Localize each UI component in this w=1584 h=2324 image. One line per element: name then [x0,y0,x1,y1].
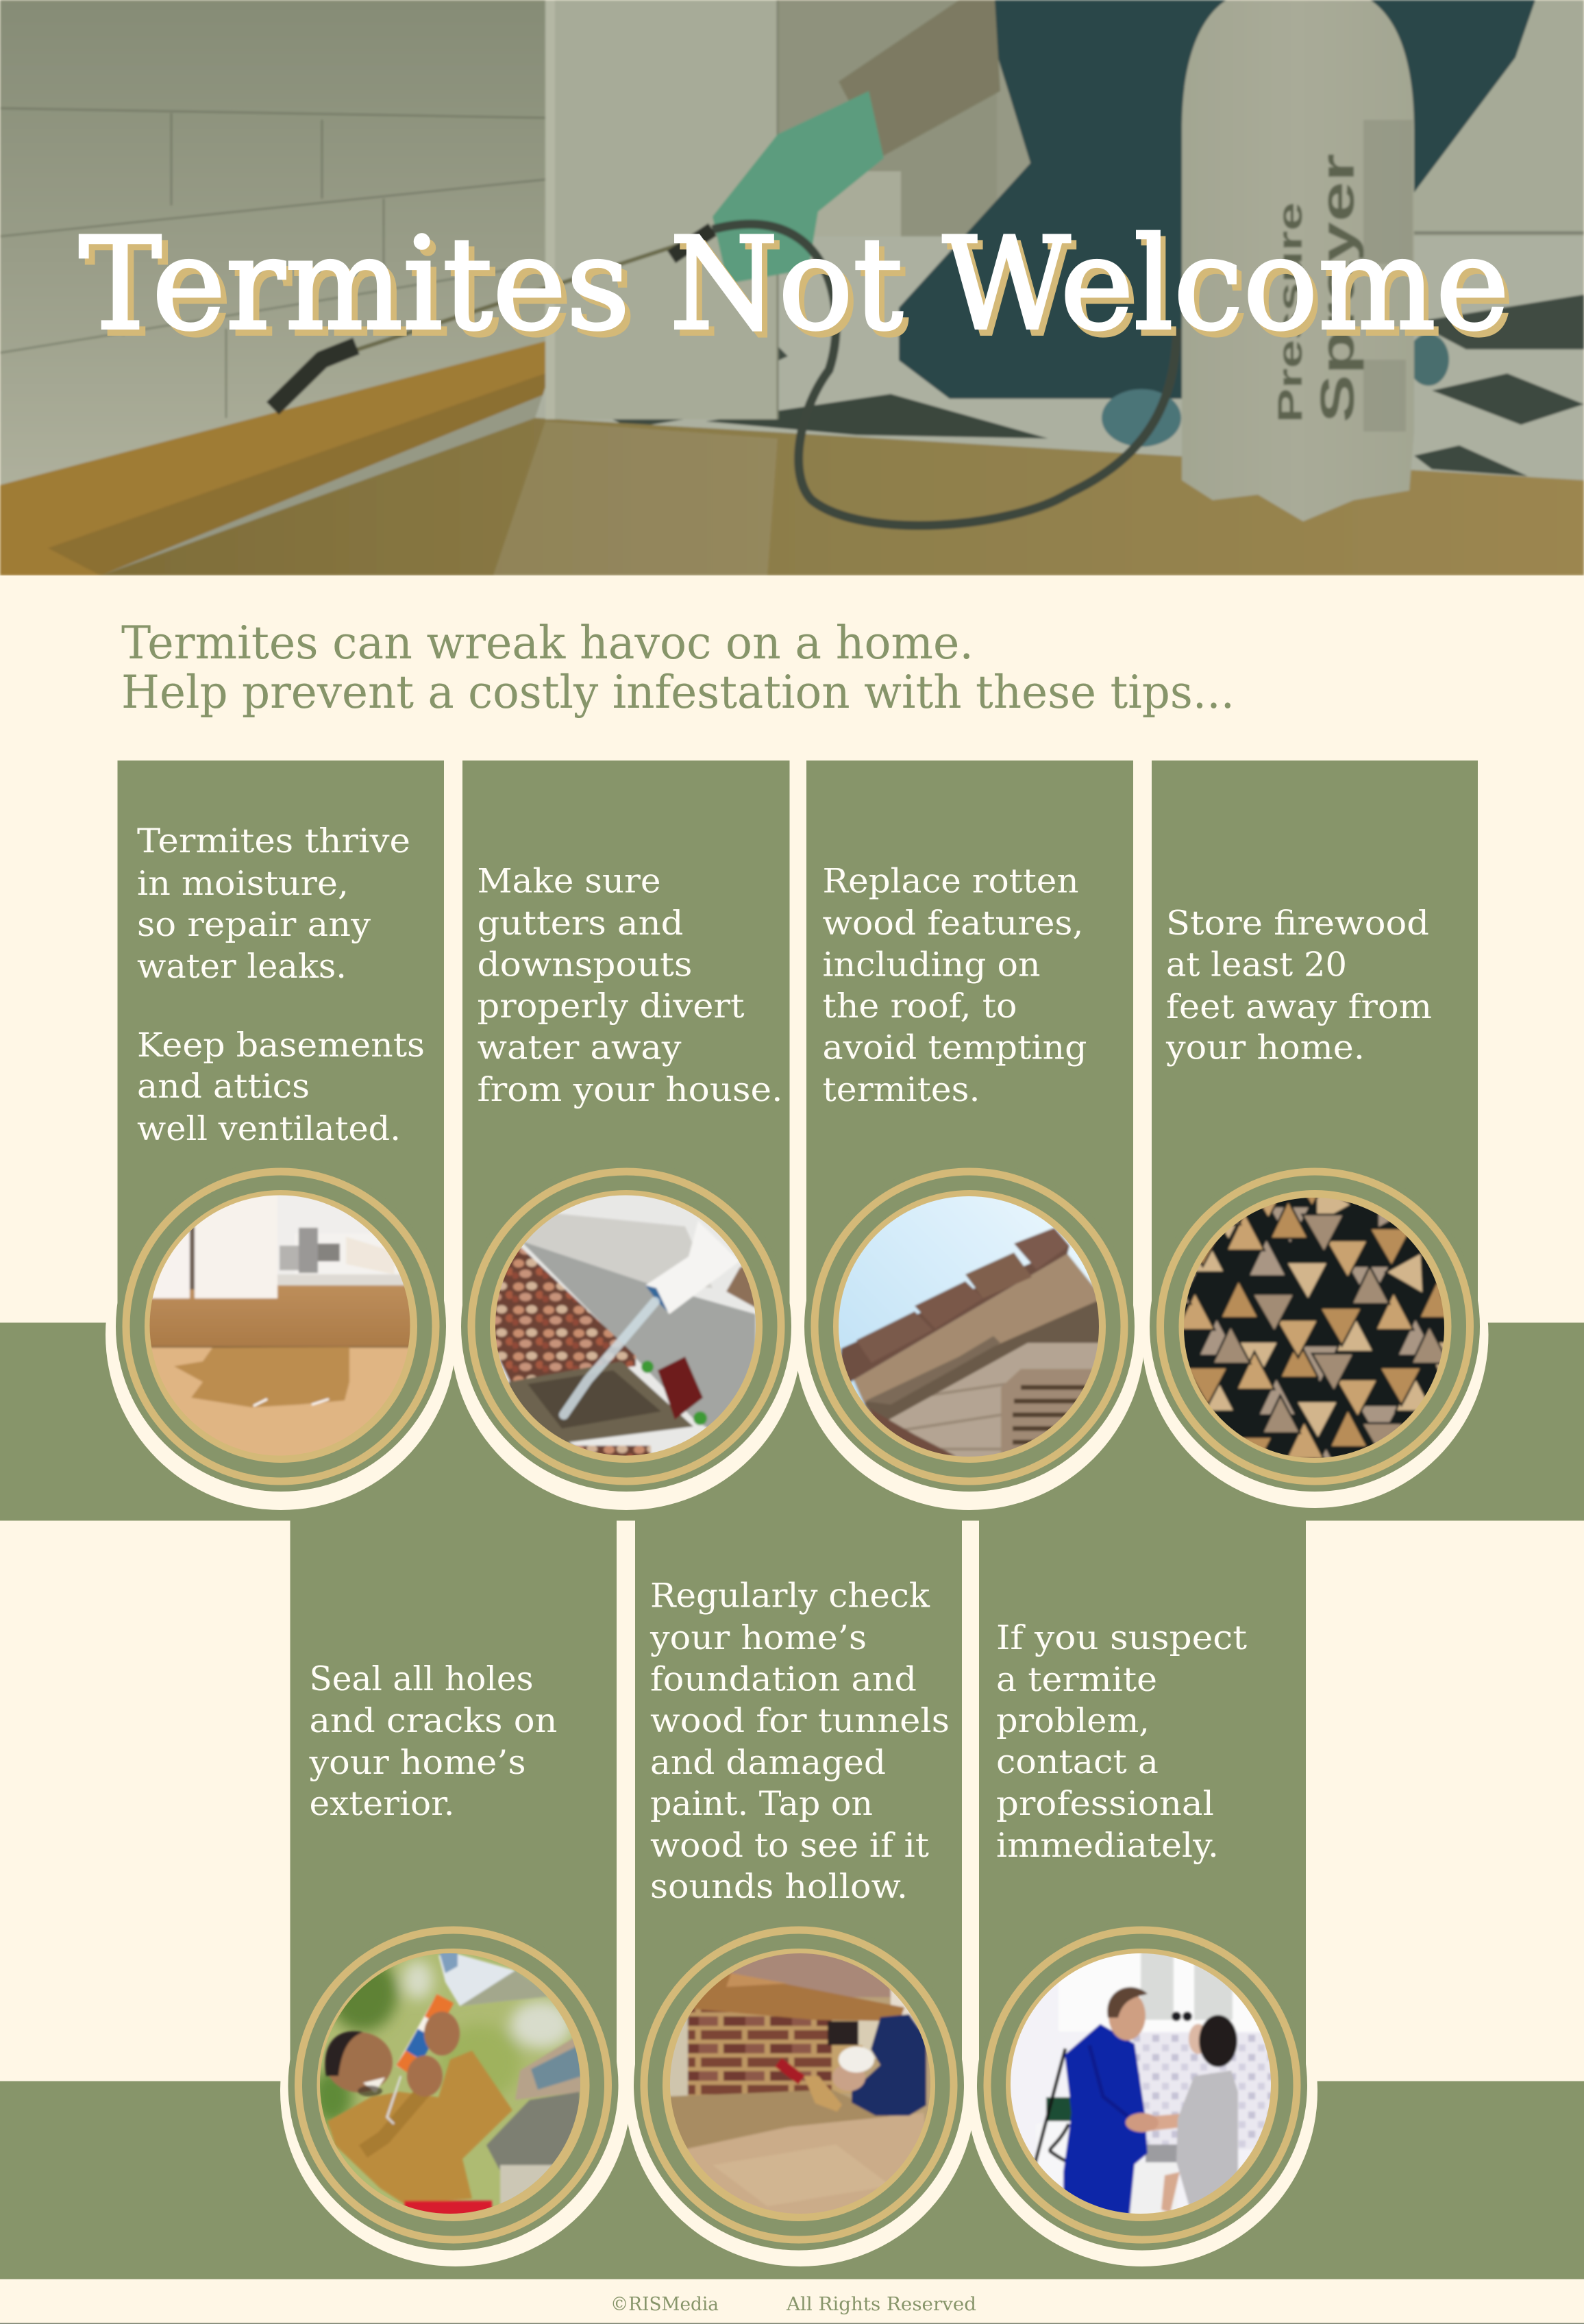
tip 6 text: Regularly check [650,1576,930,1616]
tip 6 text: your home’s [649,1618,867,1657]
photo: roof eave with rotten wood [832,1192,1106,1466]
tip 7 text: If you suspect [996,1618,1247,1657]
tip 2 text [477,862,782,1109]
tip 6 text: and damaged [650,1743,886,1782]
tip 1 text: so repair any [137,905,371,944]
tip 3 text: termites. [822,1070,980,1109]
tip 3 text: Replace rotten [822,862,1078,900]
panel: tip 1 moisture [106,761,456,1510]
intro text: Help prevent a costly infestation with these tips... [121,666,1235,719]
tip 5 text: and cracks on [310,1701,558,1740]
tip 2 text: downspouts [477,945,692,984]
footer: ©RISMedia [610,2294,719,2315]
footer [0,2294,1584,2324]
tip 2 text: Make sure [477,862,660,900]
gold ring frame [815,1172,1124,1481]
tip 6 text: sounds hollow. [650,1867,908,1906]
tip 7 text: professional [996,1784,1214,1823]
tip 1 text: well ventilated. [137,1109,401,1148]
tip 1 text: and attics [137,1067,310,1106]
tip 1 text [137,821,425,1148]
tip 7 text: immediately. [996,1826,1219,1865]
intro text: Termites can wreak havoc on a home. [121,617,974,669]
green band behind first row [0,1322,1584,1521]
tip 7 text: contact a [996,1742,1159,1781]
tip 4 text: at least 20 [1166,945,1347,984]
tip 2 text: gutters and [477,904,684,943]
photo: water leak on wood floor [144,1192,418,1466]
tip 2 text: from your house. [477,1070,782,1109]
footer: All Rights Reserved [786,2294,976,2315]
photo: stacked firewood [1184,1198,1444,1458]
tip 6 text: wood to see if it [650,1826,929,1865]
tip 4 text: feet away from [1166,987,1432,1026]
tip 4 text: your home. [1165,1028,1365,1067]
panel: tip 4 firewood [1143,761,1488,1508]
green band behind second row [0,2081,1584,2279]
tip 3 text: including on [822,945,1040,984]
tip 6 text [649,1576,950,1906]
hero photo: technician spraying for termites [0,0,1584,576]
tip 7 text: a termite [996,1660,1157,1699]
gold ring frame [1161,1172,1470,1481]
title: Termites Not Welcome [79,210,1509,358]
tip 6 text: paint. Tap on [650,1784,873,1823]
photo: man applying caulk [320,1953,580,2214]
tip 6 text: wood for tunnels [650,1701,950,1740]
panel: tip 5 seal cracks [280,1520,631,2266]
tip 1 text: water leaks. [137,947,347,986]
hero photo: technician spraying for termites: Pressure [1271,202,1309,423]
panel: tip 3 rotten wood [794,761,1145,1510]
gold ring frame [126,1172,436,1481]
photo: inspector in crawl space [665,1949,939,2223]
tip 1 text: Keep basements [137,1026,425,1065]
tip 1 text: in moisture, [137,864,349,903]
panel: tip 2 gutters [451,761,802,1510]
tip 3 text [822,862,1087,1109]
tip 2 text: properly divert [477,987,745,1026]
photo: downspout diverting water [490,1192,764,1466]
hero photo: technician spraying for termites: Sprayer [1311,153,1364,423]
gold ring frame [471,1172,781,1481]
tip 4 text [1165,904,1432,1067]
gold ring frame [644,1930,954,2240]
tip 2 text: water away [477,1028,682,1067]
panel: tip 6 inspect foundation [625,1520,976,2266]
tip 3 text: the roof, to [822,987,1017,1026]
tip 3 text: wood features, [822,904,1084,943]
tip 7 text [996,1618,1247,1865]
photo: technician shaking hands with homeowner [1007,1949,1281,2223]
tip 6 text: foundation and [650,1659,917,1699]
gold ring frame [299,1930,608,2240]
tip 7 text: problem, [996,1701,1150,1740]
tip 5 text [308,1659,558,1823]
gold ring frame [987,1930,1297,2240]
title: Termites Not Welcome [85,216,1514,364]
tip 1 text: Termites thrive [137,821,410,861]
tip 5 text: exterior. [310,1784,455,1823]
intro text [121,617,1235,719]
tip 3 text: avoid tempting [822,1028,1087,1067]
tip 5 text: your home’s [308,1743,526,1782]
tip 4 text: Store firewood [1166,904,1429,943]
panel: tip 7 call a professional [967,1520,1317,2266]
tip 5 text: Seal all holes [310,1659,533,1698]
